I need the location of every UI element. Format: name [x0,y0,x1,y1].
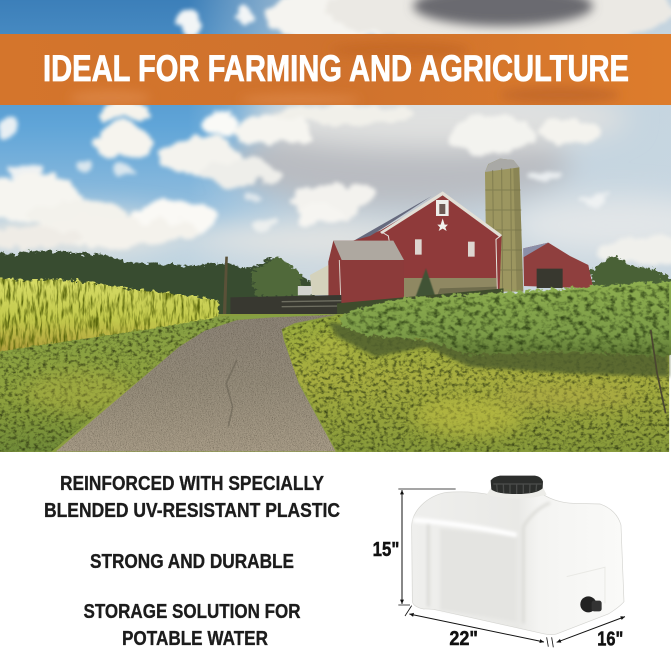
feature: potable water: STORAGE SOLUTION FOR [84,600,301,623]
depth dimension [557,617,625,642]
hill shadow [329,322,669,377]
ground under barn [337,288,504,314]
sky [0,0,671,300]
feature: UV-resistant: BLENDED UV-RESISTANT PLASTIC [44,499,340,522]
barn complex [300,159,593,312]
tank drain fitting [580,596,602,612]
height dimension [398,489,456,605]
back barn [523,243,593,288]
fence left [230,295,341,315]
water tank product with dimensions [373,476,625,650]
16 inch label: 16" [597,628,623,650]
orange title banner [0,34,671,106]
feature: potable water: POTABLE WATER [122,627,268,650]
15 inch label: 15" [373,539,399,561]
ground base [0,314,669,454]
silo [485,159,523,292]
fence [300,296,316,297]
fields and road [0,257,671,454]
features text [44,472,340,650]
feature: UV-resistant [44,472,340,522]
main red barn [353,192,502,298]
white shed behind fence [298,286,311,295]
tank body [412,492,624,635]
feature: potable water [84,600,301,650]
right grass [282,315,669,452]
side building [310,240,404,303]
feature: strong and durable: STRONG AND DURABLE [90,550,294,573]
clouds [0,0,671,264]
corn field [0,277,220,353]
road [55,315,336,452]
utility pole [223,257,228,317]
feature: UV-resistant: REINFORCED WITH SPECIALLY [60,472,324,495]
width dimension [405,606,553,647]
farm photo background [0,0,671,454]
22 inch label: 22" [449,628,478,650]
crop hill [339,281,671,357]
left grass [0,318,217,452]
tank cap [487,476,547,499]
white lower panel [0,452,671,671]
treeline [0,249,671,314]
